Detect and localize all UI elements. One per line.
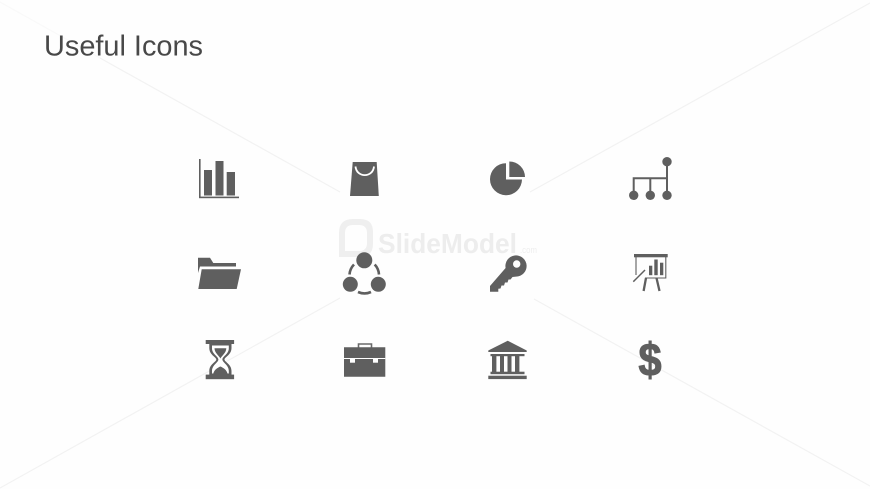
icon: briefcase	[344, 344, 385, 377]
icon: bar chart	[199, 159, 239, 198]
watermark: SlideModel	[378, 228, 517, 259]
icon: dollar sign: $	[638, 335, 662, 386]
icon: hierarchy	[629, 157, 672, 200]
icon: pie chart	[490, 162, 525, 195]
icon: presentation board	[633, 254, 668, 291]
icon: key	[490, 255, 527, 292]
title: Useful Icons	[44, 30, 203, 62]
icon: hourglass	[206, 340, 234, 379]
icon: bank	[488, 341, 527, 379]
icon: shopping bag	[350, 162, 379, 196]
watermark: .com	[520, 245, 537, 255]
icon: connected circles	[343, 252, 386, 293]
icon: folder	[198, 258, 241, 289]
watermark	[339, 219, 537, 259]
